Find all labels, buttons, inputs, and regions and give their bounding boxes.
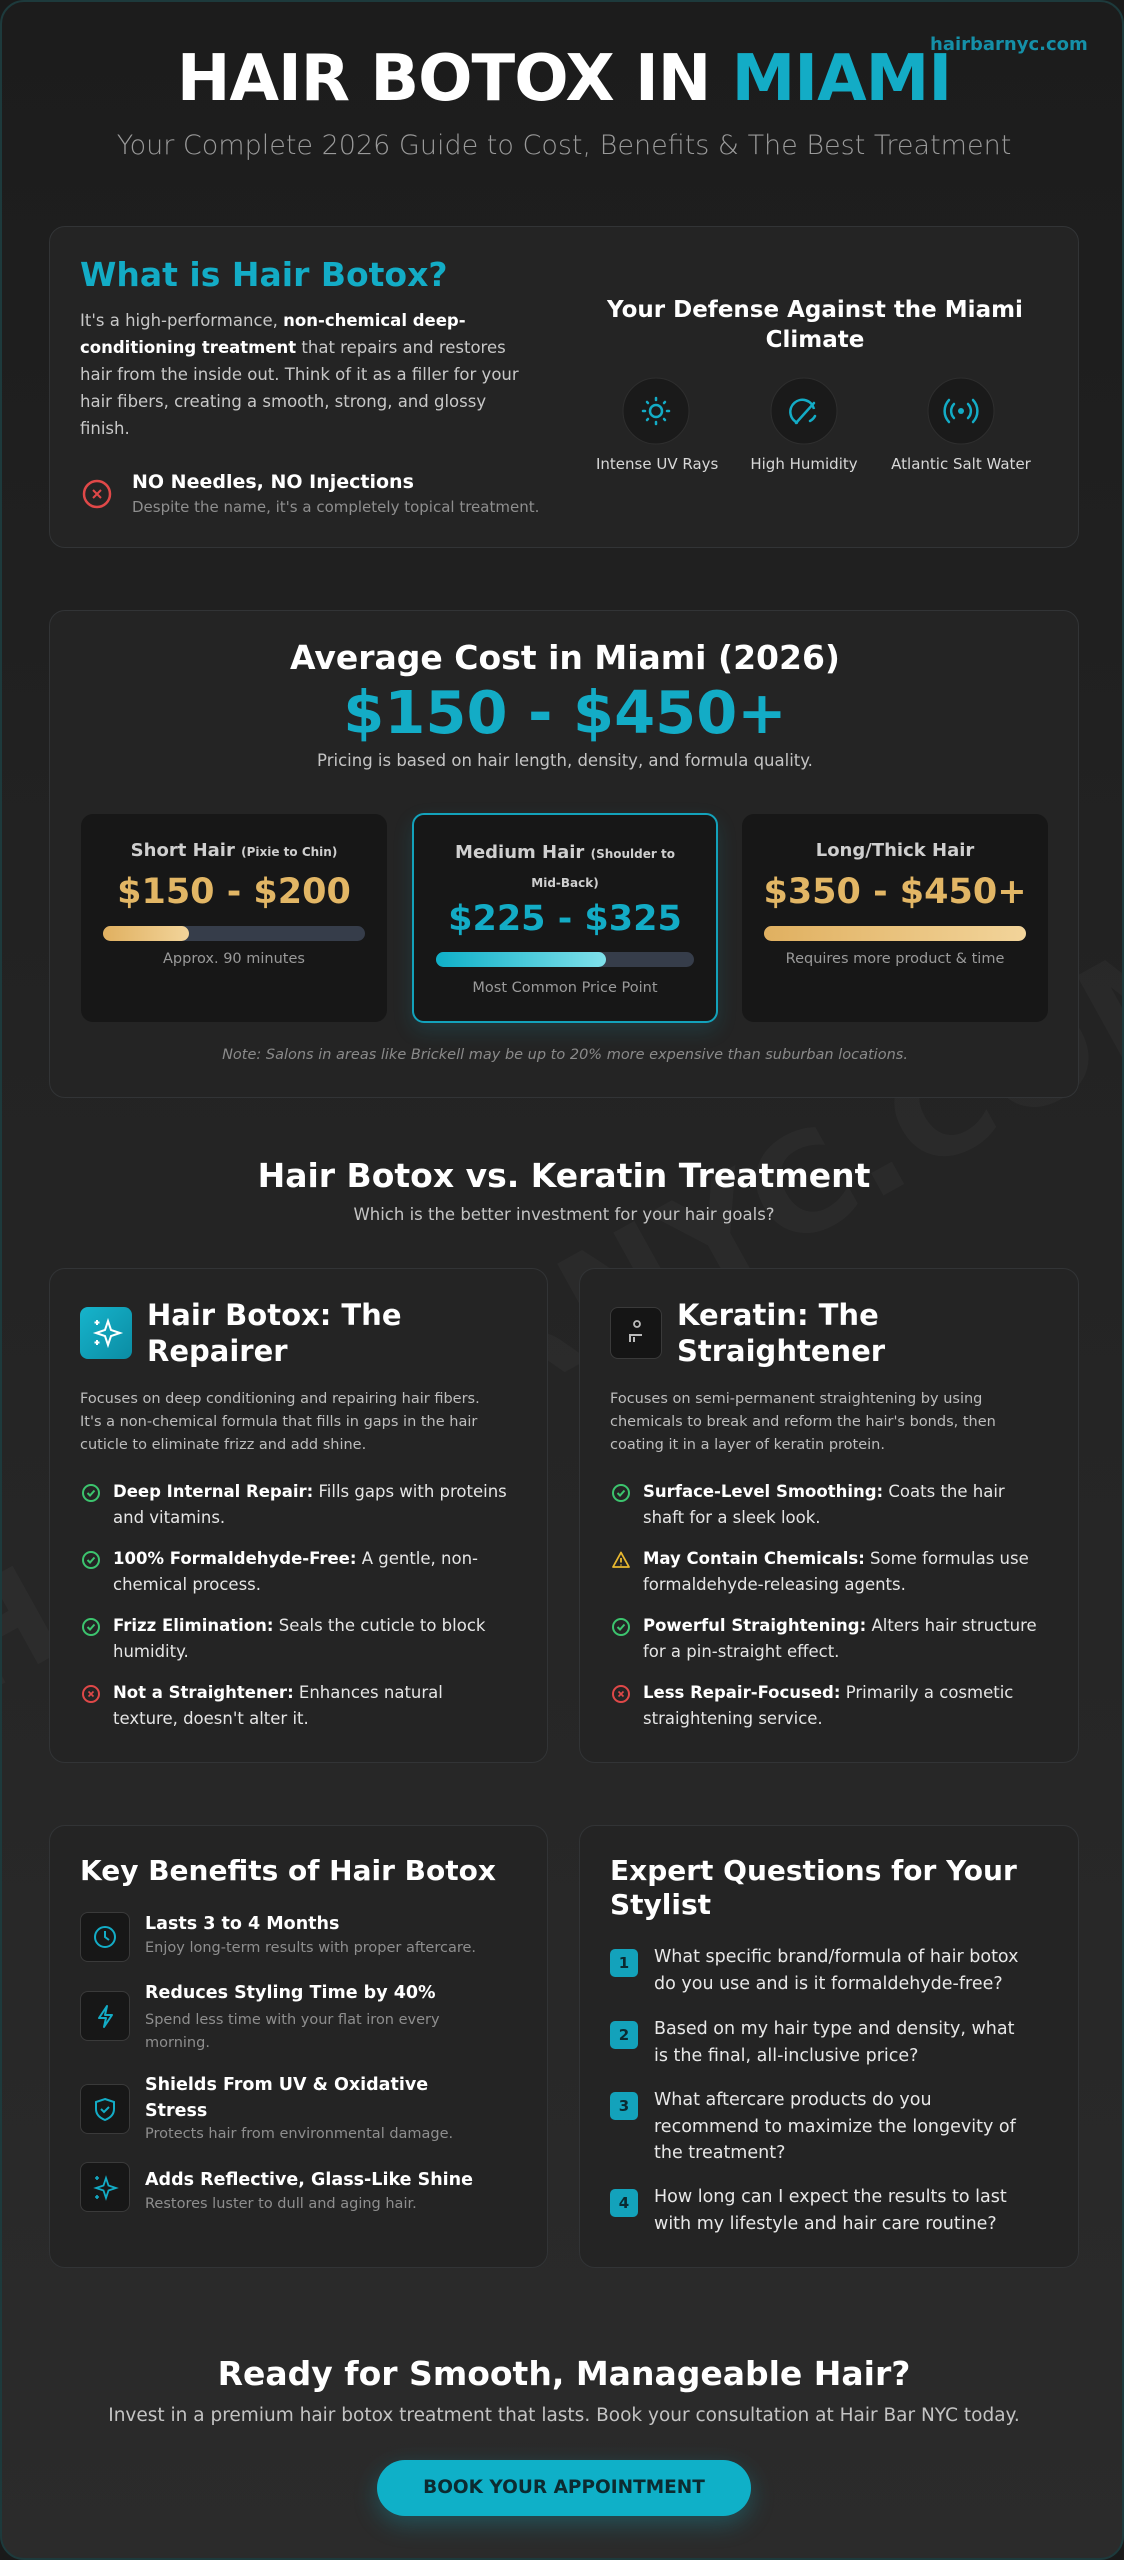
heading: average cost: Average Cost in Miami (2026) <box>290 638 840 677</box>
text: description: It's a high-performance, non-chemical deep-conditioning treatment that repairs and restores hair from the inside out. Think of it as a filler for your hair fibers, creating a smooth, strong, and glossy finish. <box>80 311 519 438</box>
cta text: Invest in a premium hair botox treatment that lasts. Book your consultation at Hair Bar NYC today. <box>108 2405 1020 2426</box>
benefit: styling time: Reduces Styling Time by 40% <box>145 1983 436 2003</box>
heading: vs: Hair Botox vs. Keratin Treatment <box>258 1156 870 1195</box>
benefit: styling time: Spend less time with your flat iron every morning. <box>145 2012 440 2051</box>
card: short: Approx. 90 minutes <box>163 951 305 967</box>
text: botox desc: Focuses on deep conditioning and repairing hair fibers. It's a non-chemical formula that fills in gaps in the hair cuticle to eliminate frizz and add shine. <box>80 1391 480 1453</box>
benefit: styling time <box>80 1983 440 2051</box>
card: long <box>742 814 1048 1022</box>
card: long: Requires more product & time <box>786 951 1004 967</box>
big price: $150 - $450+ <box>343 678 787 747</box>
benefit: shine <box>80 2162 473 2212</box>
list: keratin: Surface-Level Smoothing: Coats the hair shaft for a sleek look. <box>643 1482 1005 1527</box>
subtitle: Your Complete 2026 Guide to Cost, Benefits & The Best Treatment <box>117 130 1011 161</box>
list: botox: Frizz Elimination: Seals the cuticle to block humidity. <box>113 1616 485 1661</box>
panel: keratin straightener <box>579 1268 1079 1763</box>
benefit: lasts <box>80 1912 476 1962</box>
panel: key benefits <box>49 1825 548 2268</box>
heading: defense: Your Defense Against the Miami Climate <box>607 297 1023 353</box>
list: keratin <box>612 1482 1037 1728</box>
heading: repairer <box>147 1298 402 1368</box>
heading: repairer: Repairer <box>147 1334 288 1368</box>
benefit: lasts: Enjoy long-term results with proper aftercare. <box>145 1940 476 1956</box>
card: medium: Mid-Back) <box>531 876 599 890</box>
question 3: 3 <box>619 2097 629 2115</box>
list: botox: 100% Formaldehyde-Free: A gentle, non-chemical process. <box>113 1549 478 1594</box>
list: keratin: Powerful Straightening: Alters hair structure for a pin-straight effect. <box>643 1616 1037 1661</box>
list: keratin: May Contain Chemicals: Some formulas use formaldehyde-releasing agents. <box>643 1549 1029 1594</box>
heading: straightener: Keratin: The <box>677 1298 879 1332</box>
icon: x circle <box>82 480 112 508</box>
benefit: shine: Restores luster to dull and aging hair. <box>145 2196 417 2212</box>
icon: sparkles <box>80 1307 132 1359</box>
panel: what is hair botox <box>49 226 1079 548</box>
card: medium: $225 - $325 <box>448 899 682 939</box>
question 4: How long can I expect the results to last with my lifestyle and hair care routine? <box>654 2187 1007 2234</box>
icon: humidity: High Humidity <box>750 455 858 473</box>
text: keratin desc: Focuses on semi-permanent straightening by using chemicals to break and reform the hair's bonds, then coating it in a layer of keratin protein. <box>610 1391 996 1453</box>
site url: hairbarnyc.com <box>930 34 1088 55</box>
heading: repairer: Hair Botox: The <box>147 1298 402 1332</box>
subheading: vs: Which is the better investment for your hair goals? <box>353 1205 775 1224</box>
icon: salt water <box>891 378 1031 473</box>
list: botox <box>82 1482 507 1728</box>
heading: straightener: Straightener <box>677 1334 885 1368</box>
list: botox: Deep Internal Repair: Fills gaps with proteins and vitamins. <box>113 1482 507 1527</box>
heading: what is: What is Hair Botox? <box>80 255 448 294</box>
title: HAIR BOTOX IN MIAMI <box>177 42 951 116</box>
card: short: Short Hair (Pixie to Chin) <box>131 840 337 861</box>
icon: straightener <box>610 1307 662 1359</box>
benefit: shields: Shields From UV & Oxidative Stress <box>145 2075 428 2121</box>
heading: straightener <box>677 1298 885 1368</box>
heading: benefits: Key Benefits of Hair Botox <box>80 1854 496 1887</box>
card: short <box>81 814 387 1022</box>
card: medium: Medium Hair (Shoulder to <box>455 842 675 863</box>
cta button <box>377 2460 751 2516</box>
card: medium: Most Common Price Point <box>472 980 658 996</box>
benefit: shine: Adds Reflective, Glass-Like Shine <box>145 2170 473 2190</box>
icon: salt water: Atlantic Salt Water <box>891 455 1031 473</box>
callout: no needles <box>82 471 539 516</box>
panel: average cost <box>49 610 1079 1098</box>
text: pricing note: Pricing is based on hair length, density, and formula quality. <box>317 751 813 770</box>
callout: no needles: Despite the name, it's a completely topical treatment. <box>132 498 539 516</box>
list: keratin: Less Repair-Focused: Primarily a cosmetic straightening service. <box>643 1683 1013 1728</box>
card: long: Long/Thick Hair <box>816 840 974 861</box>
benefit: shields <box>80 2075 453 2142</box>
list: botox: Not a Straightener: Enhances natural texture, doesn't alter it. <box>113 1683 443 1728</box>
icon: uv: Intense UV Rays <box>596 455 718 473</box>
card: long: $350 - $450+ <box>763 872 1027 912</box>
panel: expert questions <box>579 1825 1079 2268</box>
note: Note: Salons in areas like Brickell may be up to 20% more expensive than suburban locations. <box>222 1047 908 1063</box>
question 3: What aftercare products do you recommend to maximize the longevity of the treatment? <box>654 2090 1016 2163</box>
question 1: What specific brand/formula of hair botox do you use and is it formaldehyde-free? <box>654 1947 1018 1994</box>
heading: questions: Expert Questions for Your Stylist <box>610 1854 1017 1921</box>
question 2: 2 <box>619 2026 629 2044</box>
cta heading: Ready for Smooth, Manageable Hair? <box>218 2354 910 2393</box>
card: short: $150 - $200 <box>117 872 351 912</box>
callout: no needles: NO Needles, NO Injections <box>132 471 414 493</box>
question 4: 4 <box>619 2194 629 2212</box>
question 1: 1 <box>619 1954 629 1972</box>
panel: hair botox repairer <box>49 1268 548 1763</box>
icon: uv <box>596 378 718 473</box>
question 2: Based on my hair type and density, what is the final, all-inclusive price? <box>654 2019 1014 2066</box>
benefit: shields: Protects hair from environmental damage. <box>145 2126 453 2142</box>
benefit: lasts: Lasts 3 to 4 Months <box>145 1914 339 1934</box>
icon: humidity <box>750 378 858 473</box>
cta button: BOOK YOUR APPOINTMENT <box>423 2477 705 2498</box>
card: medium <box>412 813 718 1023</box>
